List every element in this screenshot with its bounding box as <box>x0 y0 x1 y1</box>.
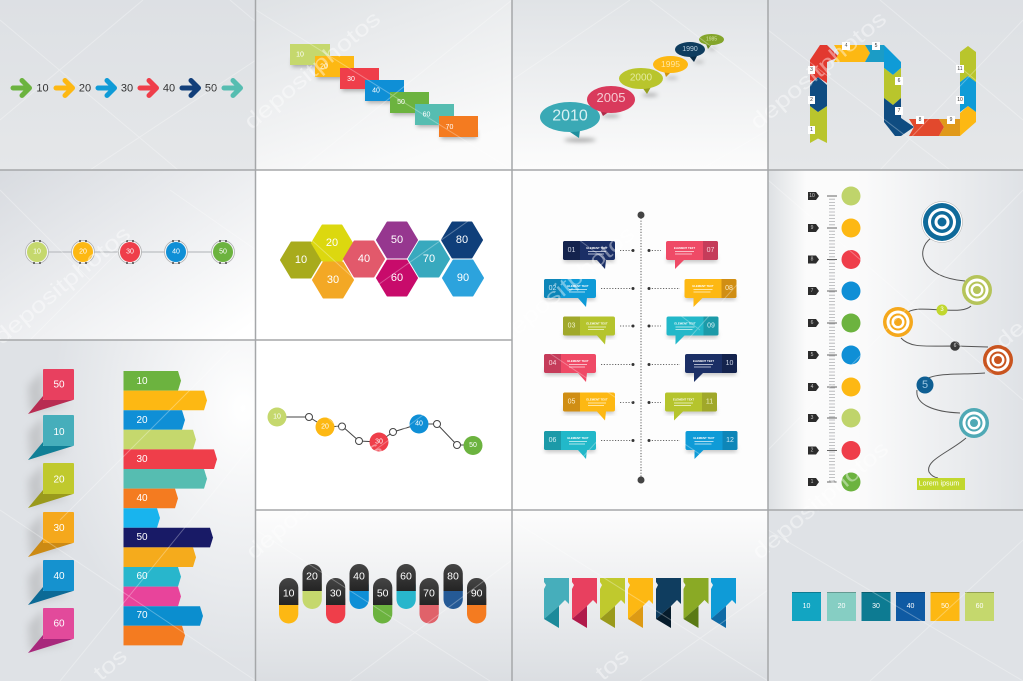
bubble 2000: 2000 <box>630 72 653 84</box>
callout 07: 07 <box>707 247 714 254</box>
connector line <box>37 251 223 253</box>
circle nodes: 10 <box>33 248 41 256</box>
panel: winding chevron ribbon <box>768 0 1023 170</box>
bubble 1995 <box>653 56 688 77</box>
callout 10: ELEMENT TEXT <box>693 359 714 363</box>
square tiles: 10 <box>803 603 810 610</box>
callout 09: 09 <box>707 322 715 330</box>
lorem ipsum label <box>917 478 965 490</box>
central axis <box>638 212 644 484</box>
step boxes: 20 <box>320 64 328 70</box>
capsule labels: 20 <box>306 570 318 582</box>
square tiles: 20 <box>838 603 845 610</box>
panel: inset squares <box>768 510 1023 681</box>
step boxes: 60 <box>423 112 430 118</box>
arrow labels: 20 <box>79 82 91 94</box>
ribbon number tags: 6 <box>898 78 901 84</box>
ribbon orange <box>628 578 653 628</box>
node dots <box>33 240 227 264</box>
dotted connectors <box>601 250 680 440</box>
capsule labels: 70 <box>423 588 435 600</box>
bubble 2005 <box>587 86 635 116</box>
callout 04: ELEMENT TEXT <box>567 359 589 363</box>
callout 11: ELEMENT TEXT <box>673 398 694 402</box>
flag 10 <box>28 415 74 460</box>
capsule labels: 10 <box>283 588 295 600</box>
callout 05: 05 <box>568 398 575 406</box>
panel: folded ribbon bookmarks <box>512 510 768 681</box>
callout 02 <box>544 279 596 307</box>
watermark text: depositphotos <box>239 6 385 134</box>
square tiles: 60 <box>976 603 983 610</box>
circle nodes: 30 <box>126 248 134 256</box>
chart nodes: 20 <box>321 424 329 430</box>
chart nodes: 50 <box>469 442 477 449</box>
circle nodes <box>26 240 234 264</box>
callout 09: ELEMENT TEXT <box>674 322 696 326</box>
flag 20: 20 <box>53 474 65 486</box>
hexagons <box>281 222 483 298</box>
stacked arrow bars <box>124 371 217 645</box>
callout 01 <box>563 241 615 269</box>
ruler tags: 3 <box>811 415 814 421</box>
ribbon olive <box>684 578 708 628</box>
capsule labels: 80 <box>447 570 459 582</box>
callout 02: 02 <box>549 285 556 292</box>
circle nodes: 20 <box>79 248 87 256</box>
step marker 3: 3 <box>940 307 944 313</box>
chart nodes: 40 <box>415 420 423 428</box>
step boxes: 40 <box>372 88 380 94</box>
target 3 <box>883 307 913 337</box>
flag shadows <box>28 370 70 651</box>
panel: vertical callout timeline <box>512 170 768 510</box>
panel: circle timeline <box>0 170 256 340</box>
callout 05: ELEMENT TEXT <box>586 398 608 402</box>
hexagons: 40 <box>358 253 370 265</box>
panel: two-tone capsules <box>256 510 512 681</box>
panel: ruler scale and target path <box>768 170 1023 510</box>
chart nodes <box>268 408 482 455</box>
callout 10: 10 <box>726 360 733 367</box>
ribbon number tags <box>808 42 964 134</box>
bubble 1995: 1995 <box>661 59 680 69</box>
bar labels: 40 <box>136 493 148 504</box>
lorem ipsum label: Lorem ipsum <box>919 480 959 488</box>
ruler tags: 7 <box>811 288 814 294</box>
ribbon number tags: 10 <box>957 97 963 103</box>
callout 12 <box>686 431 738 459</box>
ribbon segments <box>810 45 976 143</box>
ribbon number tags: 4 <box>845 43 848 49</box>
hexagons: 70 <box>423 253 435 265</box>
step boxes: 50 <box>397 99 405 106</box>
ruler tags: 2 <box>811 448 814 454</box>
step boxes: 70 <box>446 124 453 131</box>
ribbon number tags: 9 <box>950 117 953 123</box>
step marker 6 <box>950 341 960 351</box>
step marker 5 <box>916 376 934 394</box>
bubble 2010 <box>540 102 600 138</box>
ribbon number tags: 11 <box>957 66 963 72</box>
callout 04 <box>544 354 596 382</box>
callout 07: ELEMENT TEXT <box>674 246 695 250</box>
arrow labels: 50 <box>205 82 217 94</box>
callout 10 <box>685 354 737 382</box>
capsule labels: 90 <box>471 588 483 600</box>
square tiles <box>792 592 994 621</box>
square tiles: 40 <box>907 603 914 610</box>
ruler minor ticks <box>829 196 835 481</box>
ribbon teal <box>544 578 569 628</box>
capsule labels: 50 <box>377 588 389 600</box>
capsule labels: 60 <box>400 570 412 582</box>
watermark text: depositphotos <box>747 436 893 564</box>
ring markers <box>306 414 460 448</box>
connector dots <box>632 249 650 442</box>
ribbon red <box>572 578 597 628</box>
flag 20 <box>28 463 74 508</box>
bubble 2010: 2010 <box>552 108 588 124</box>
flag 60: 60 <box>53 618 65 630</box>
bar labels <box>136 376 148 621</box>
callout 08: ELEMENT TEXT <box>692 284 714 288</box>
bubble 2005: 2005 <box>597 90 625 105</box>
hexagons: 60 <box>391 272 403 284</box>
connecting polyline <box>277 417 473 445</box>
callout 01: 01 <box>568 247 575 254</box>
flag 40 <box>28 560 74 605</box>
flag 30 <box>28 512 74 557</box>
callout 06: ELEMENT TEXT <box>567 436 589 440</box>
capsule labels <box>283 570 483 600</box>
ribbon number tags: 5 <box>875 43 878 49</box>
panel: stepped rectangles <box>256 0 512 170</box>
callout 06 <box>544 431 596 459</box>
arrow labels: 30 <box>121 82 133 94</box>
ruler tags: 9 <box>811 225 814 231</box>
step boxes <box>290 44 478 137</box>
step marker 3 <box>936 304 948 316</box>
callout 12: 12 <box>726 437 734 444</box>
circle nodes: 40 <box>172 248 180 256</box>
ruler tags: 6 <box>811 320 814 326</box>
flag 10: 10 <box>53 427 65 438</box>
bubble shadows <box>564 48 716 142</box>
callout 03 <box>563 316 615 344</box>
bar labels: 20 <box>136 415 148 426</box>
ruler circles <box>842 186 860 492</box>
bar labels: 30 <box>136 454 148 465</box>
callout 03: 03 <box>568 322 575 330</box>
watermark text: depositphotos <box>745 6 891 134</box>
bubble 1990 <box>675 42 705 62</box>
target 5 <box>959 408 989 438</box>
hexagons: 90 <box>457 272 469 284</box>
callout 06: 06 <box>549 437 556 444</box>
arrow labels: 40 <box>163 82 175 94</box>
step marker 5: 5 <box>922 379 928 391</box>
arrow labels: 10 <box>36 82 49 94</box>
flag 30: 30 <box>53 523 65 534</box>
hexagons: 50 <box>391 234 403 246</box>
bubble 2000 <box>619 68 663 94</box>
watermark text: depositphotos <box>493 221 639 349</box>
ribbon number tags: 3 <box>810 67 813 73</box>
step boxes: 30 <box>347 76 355 83</box>
ribbon lime <box>600 578 625 628</box>
callout 09 <box>666 316 718 344</box>
callout 11 <box>665 392 717 420</box>
square tiles: 30 <box>872 603 880 610</box>
ribbon number tags: 1 <box>810 127 813 133</box>
panel: arrow timeline <box>0 0 256 170</box>
target 1 <box>922 202 962 242</box>
callout 05 <box>563 392 615 420</box>
callout 08: 08 <box>725 285 733 292</box>
panel: flags and stacked bars <box>0 340 256 681</box>
bubble 1985 <box>699 34 724 49</box>
capsule labels: 30 <box>330 588 342 600</box>
panel: year speech bubbles <box>512 0 768 170</box>
flag 40: 40 <box>53 571 65 582</box>
callout 08 <box>684 279 736 307</box>
ribbon number tags: 2 <box>810 97 813 103</box>
target 4 <box>983 345 1013 375</box>
panel: hexagon cluster <box>256 170 512 340</box>
ruler tags <box>808 192 819 486</box>
chart nodes: 10 <box>273 414 281 420</box>
ruler major ticks <box>827 196 837 482</box>
callout 04: 04 <box>549 360 556 367</box>
winding path <box>901 238 988 478</box>
capsule bottoms <box>279 576 486 624</box>
square tiles: 50 <box>941 603 949 610</box>
panel: connected line chart <box>256 340 512 510</box>
ribbon number tags: 8 <box>919 117 922 123</box>
hexagons: 30 <box>327 274 339 286</box>
ribbon blue <box>711 578 736 628</box>
ruler tags: 4 <box>811 384 814 390</box>
step marker 6: 6 <box>954 343 957 349</box>
ruler tags: 1 <box>811 479 814 485</box>
callout 07 <box>666 241 718 269</box>
flag 50: 50 <box>53 380 65 390</box>
callout 12: ELEMENT TEXT <box>693 436 715 440</box>
callout 02: ELEMENT TEXT <box>567 284 589 288</box>
circle nodes: 50 <box>219 248 227 256</box>
hexagons: 20 <box>326 237 338 249</box>
bar labels: 70 <box>136 610 148 621</box>
callout 11: 11 <box>706 398 713 406</box>
callout 01: ELEMENT TEXT <box>586 246 608 250</box>
ruler tags: 8 <box>811 256 814 262</box>
watermark text: depositphotos <box>241 436 387 564</box>
arrow icons <box>13 80 240 96</box>
ruler tags: 5 <box>811 352 814 358</box>
ribbon number tags: 7 <box>898 108 901 114</box>
callout 03: ELEMENT TEXT <box>586 322 608 326</box>
capsule tops <box>279 564 486 605</box>
arrow labels <box>36 82 217 94</box>
bar labels: 10 <box>136 376 148 387</box>
capsule labels: 40 <box>353 570 365 582</box>
chart nodes: 30 <box>375 438 383 446</box>
step boxes: 10 <box>296 52 304 58</box>
bar labels: 60 <box>136 571 148 582</box>
hexagons: 10 <box>295 254 307 266</box>
hexagons: 80 <box>456 234 468 246</box>
target 2 <box>962 275 992 305</box>
bubble 1990: 1990 <box>682 46 698 53</box>
ribbon navy <box>656 578 681 628</box>
step shadows <box>292 59 477 139</box>
flag 50 <box>28 369 74 414</box>
ruler tags: 10 <box>809 193 815 199</box>
bubble 1985: 1985 <box>706 36 717 42</box>
flag 60 <box>28 608 74 653</box>
bar labels: 50 <box>136 532 148 543</box>
